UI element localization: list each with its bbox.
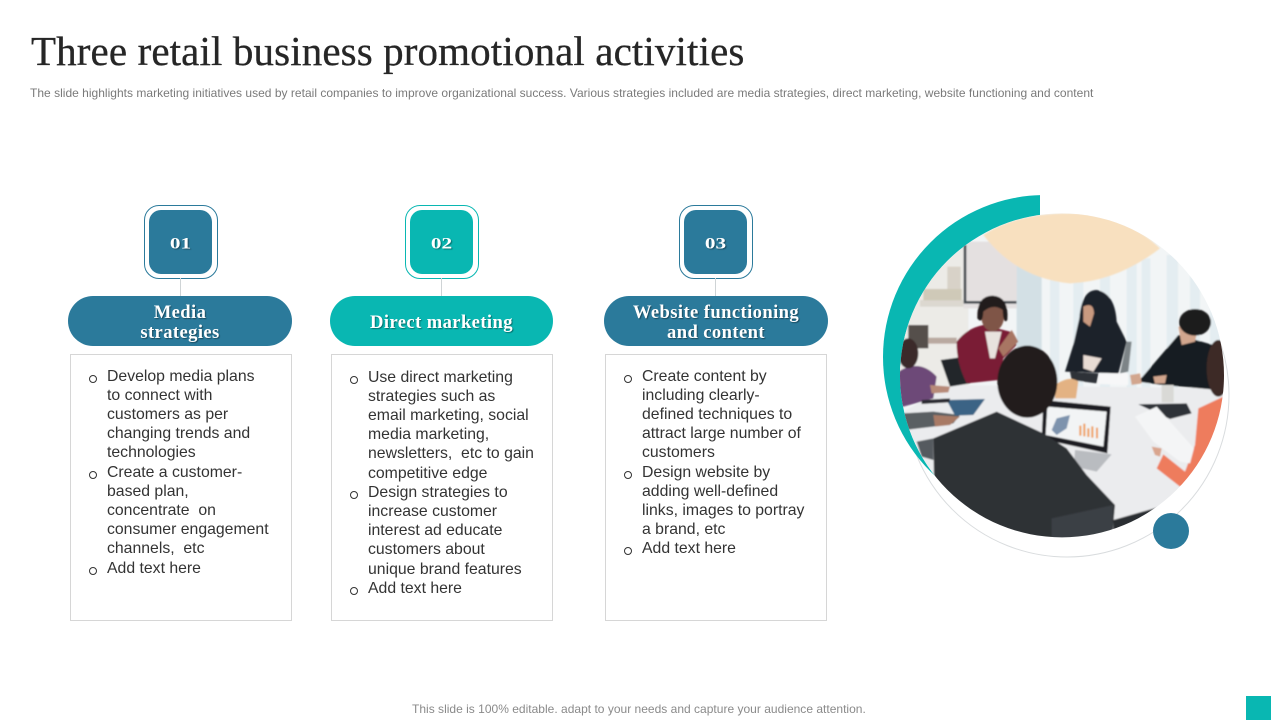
text block: direct marketing: Design strategies to: [368, 484, 508, 501]
footer note: This slide is 100% editable. adapt to your needs and capture your audience attention.: [412, 702, 866, 716]
heading: direct marketing: Direct marketing: [370, 312, 513, 332]
text block: direct marketing: newsletters, etc to gain: [368, 445, 534, 462]
person: right in orange: [1135, 340, 1230, 487]
person: woman in black: [1065, 290, 1132, 373]
text block: direct marketing: customers about: [368, 541, 485, 558]
text block: media strategies: changing trends and: [107, 425, 250, 442]
text block: website functioning and content: links, images to portray: [642, 502, 804, 519]
person: man in red jacket: [957, 296, 1018, 383]
text block: media strategies: consumer engagement: [107, 521, 269, 538]
blue accent dot: [1153, 513, 1189, 549]
text block: website functioning and content: including clearly-: [642, 387, 760, 404]
heading: media strategies: Media: [154, 302, 206, 322]
number badge 03: 03: [705, 235, 726, 252]
panel: media strategies: [68, 205, 292, 621]
text block: website functioning and content: defined techniques to: [642, 406, 792, 423]
number badge 02: 02: [431, 235, 452, 252]
text block: media strategies: channels, etc: [107, 540, 204, 557]
text block: direct marketing: competitive edge: [368, 465, 487, 482]
teal crescent: [883, 195, 1040, 476]
number badge 03: [679, 205, 753, 279]
text block: direct marketing: interest ad educate: [368, 522, 502, 539]
person: foreground man in dark jacket: [933, 346, 1115, 542]
panel: direct marketing: [330, 205, 553, 621]
text block: direct marketing: Use direct marketing: [368, 369, 513, 386]
text block: media strategies: [70, 354, 292, 621]
panel: website functioning and content: [604, 205, 828, 621]
laptop with chart: [1042, 400, 1112, 472]
text block: website functioning and content: Add text here: [642, 540, 736, 557]
meeting scene: [897, 212, 1230, 545]
text block: media strategies: Create a customer-: [107, 464, 242, 481]
text block: direct marketing: unique brand features: [368, 561, 522, 578]
text block: media strategies: to connect with: [107, 387, 212, 404]
number badge 01: 01: [170, 235, 191, 252]
text block: direct marketing: [331, 354, 553, 621]
text block: direct marketing: media marketing,: [368, 426, 489, 443]
text block: media strategies: concentrate on: [107, 502, 216, 519]
person: left in purple: [898, 338, 960, 460]
text block: media strategies: Add text here: [107, 560, 201, 577]
pendant lamp: [983, 213, 1160, 283]
text block: media strategies: Develop media plans: [107, 368, 255, 385]
circular photo: team meeting around a table: [883, 195, 1230, 558]
text block: website functioning and content: [605, 354, 827, 621]
text block: website functioning and content: Design website by: [642, 464, 770, 481]
table: [903, 385, 1227, 522]
heading: website functioning and content: and content: [667, 322, 765, 342]
title: Three retail business promotional activities: [31, 28, 744, 74]
text block: media strategies: based plan,: [107, 483, 189, 500]
text block: website functioning and content: a brand, etc: [642, 521, 725, 538]
number badge 01: [144, 205, 218, 279]
table items: [922, 372, 1192, 419]
text block: direct marketing: Add text here: [368, 580, 462, 597]
text block: website functioning and content: adding well-defined: [642, 483, 778, 500]
chair: [941, 357, 970, 387]
text block: media strategies: technologies: [107, 444, 196, 461]
heading: website functioning and content: [604, 296, 828, 346]
teal corner square: [1246, 696, 1271, 720]
heading: media strategies: strategies: [140, 322, 220, 342]
text block: direct marketing: strategies such as: [368, 388, 495, 405]
text block: direct marketing: email marketing, social: [368, 407, 529, 424]
text block: website functioning and content: attract large number of: [642, 425, 801, 442]
heading: direct marketing: [330, 296, 553, 346]
text block: direct marketing: increase customer: [368, 503, 497, 520]
heading: website functioning and content: Website functioning: [633, 302, 799, 322]
subtitle: The slide highlights marketing initiatives used by retail companies to improve organizational success. Various strategies included are media strategies, direct marketing, website functioning and content: [30, 86, 1093, 100]
text block: website functioning and content: Create content by: [642, 368, 767, 385]
person: man in black shirt: [1130, 309, 1218, 390]
number badge 02: [405, 205, 479, 279]
thin outline ring: [905, 233, 1229, 557]
text block: website functioning and content: customers: [642, 444, 715, 461]
text block: media strategies: customers as per: [107, 406, 228, 423]
heading: media strategies: [68, 296, 292, 346]
